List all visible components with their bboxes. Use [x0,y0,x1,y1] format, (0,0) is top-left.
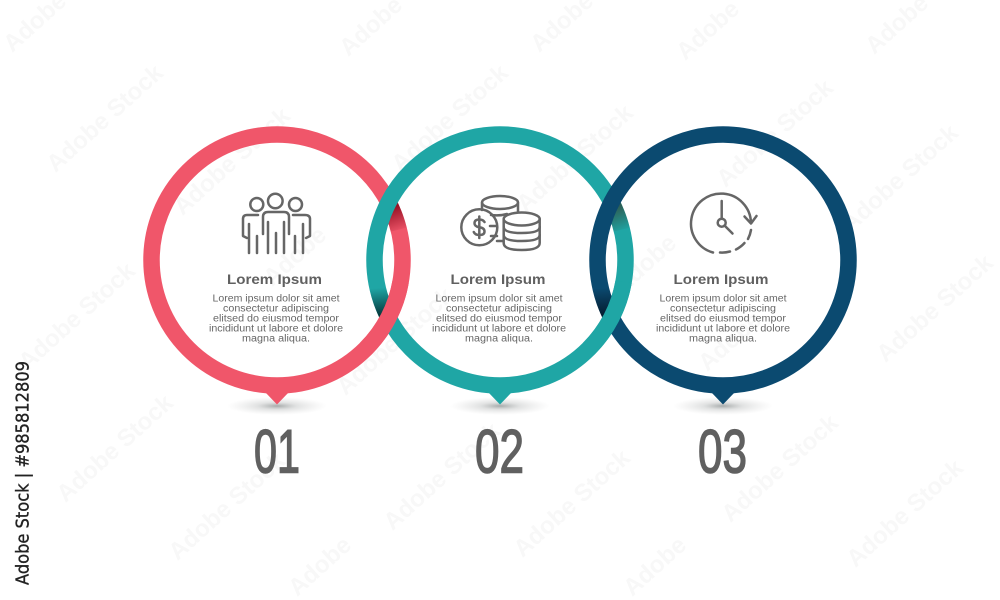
ring 1: red [152,134,402,404]
watermark pattern: Adobe [608,229,682,299]
watermark pattern: Adobe [258,221,332,291]
shadow under pin 2 [450,397,550,415]
watermark pattern: Adobe Stock [511,99,639,218]
number 01: 01 [254,418,300,486]
vertical stock credit: Adobe Stock | #985812809 [12,361,34,585]
watermark pattern: Adobe Stock [41,59,169,178]
watermark pattern: Adobe Stock [711,74,839,193]
text block 1: consectetur adipiscing [223,304,329,314]
watermark pattern: Adobe Stock [51,389,179,508]
watermark pattern: Adobe Stock [836,119,964,238]
ring 1 overlap arc [366,282,401,349]
text block 2: incididunt ut labore et dolore [432,324,566,334]
watermark pattern: Adobe Stock [386,59,514,178]
ring 2 shadow under ring 3 [612,202,622,230]
watermark pattern: Adobe Stock [508,444,636,563]
watermark pattern: Adobe [693,306,767,376]
heading 2: Lorem Ipsum [450,271,546,287]
ring 2 overlap arc [589,282,624,349]
icon: people [243,194,310,253]
number 03: 03 [698,418,747,486]
interlocking rings [152,134,848,404]
watermark pattern: Adobe Stock [163,447,291,566]
text block 1: Lorem ipsum dolor sit amet [212,294,340,304]
icon: clock [691,194,756,253]
watermark pattern: Adobe Stock [871,249,999,368]
text block 1: incididunt ut labore et dolore [209,324,343,334]
watermark pattern: Adobe [618,531,692,600]
text block 3: magna aliqua. [689,334,757,344]
watermark pattern: Adobe Stock [378,417,506,536]
text block 3: Lorem ipsum dolor sit amet [660,294,787,304]
text block 1: elitsed do eiusmod tempor [213,314,340,324]
text block 3 [656,294,790,344]
shadow under pin 3 [673,397,773,415]
text block 1: magna aliqua. [242,334,310,344]
watermark pattern: Adobe [283,531,357,600]
heading 3: Lorem Ipsum [674,271,768,287]
number 02: 02 [475,418,524,486]
ring 2: teal [374,134,626,404]
ring 3 shadow under ring 2 [600,285,612,318]
text block 3: incididunt ut labore et dolore [656,324,790,334]
icon: coins [461,196,540,250]
text block 3: elitsed do eiusmod tempor [660,314,787,324]
shadow under pin 1 [227,397,327,415]
watermark pattern: Adobe Stock [716,409,844,528]
text block 2 [432,294,566,344]
text block 2: magna aliqua. [465,334,533,344]
watermark pattern: Adobe Stock [13,257,141,376]
text block 1 [209,294,343,344]
watermark pattern: Adobe Stock [168,102,296,221]
ring 2 shadow under ring 1 [377,285,388,318]
watermark pattern: Adobe Stock [841,454,969,573]
ring 3: navy [598,134,848,404]
watermark pattern: Adobe Stock [331,282,459,401]
text block 2: consectetur adipiscing [446,304,552,314]
text block 2: Lorem ipsum dolor sit amet [436,294,563,304]
ring 1 shadow under ring 2 [388,202,399,230]
heading 1: Lorem Ipsum [227,271,322,287]
text block 2: elitsed do eiusmod tempor [436,314,563,324]
text block 3: consectetur adipiscing [670,304,776,314]
